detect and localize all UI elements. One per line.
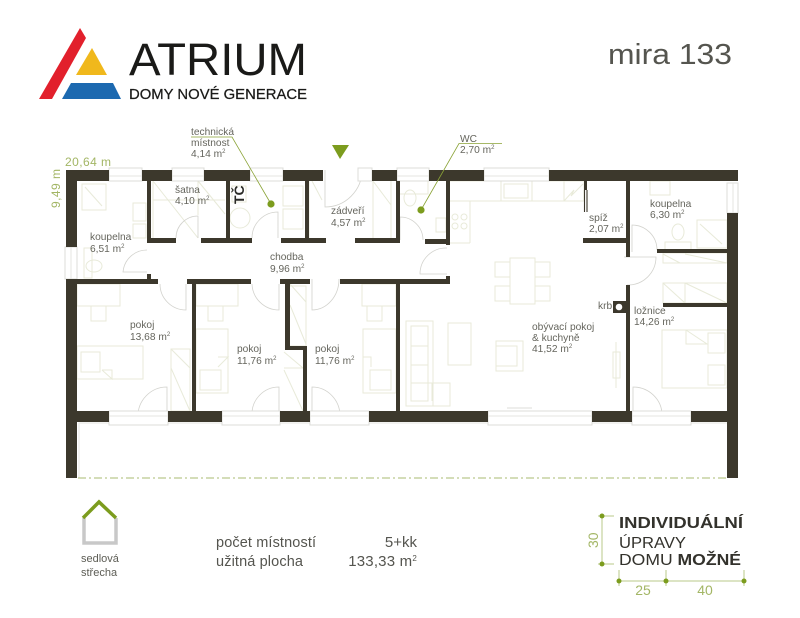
- label: zádveří: 2: [362, 218, 366, 224]
- stat: usable area: 2: [412, 554, 417, 563]
- label: pokoj 11,76 left: 11,76 m: [237, 356, 273, 367]
- icon: red stripe: [39, 28, 86, 99]
- stat: usable area: užitná plocha: [216, 554, 304, 570]
- label: pokoj 13,68: pokoj: [130, 320, 154, 331]
- label: chodba: 2: [301, 264, 305, 270]
- floor plan: [65, 168, 738, 478]
- label: ložnice: ložnice: [634, 306, 666, 317]
- label: ložnice: 14,26 m: [634, 317, 671, 328]
- walls: [66, 170, 738, 478]
- windows: [65, 168, 738, 425]
- door swings: [123, 170, 662, 417]
- label: ložnice: 2: [671, 317, 675, 323]
- label: spíž: 2,07 m: [589, 224, 620, 235]
- stat: rooms: [216, 534, 417, 551]
- label: koupelna left: 6,51 m: [90, 244, 121, 255]
- logo tagline: DOMY NOVÉ GENERACE: [129, 86, 307, 103]
- label: obývací pokoj: 2: [569, 344, 573, 350]
- krb: krb: [598, 301, 612, 312]
- label: spíž: 2: [620, 224, 624, 230]
- icon: entrance arrow: [332, 145, 349, 159]
- label: spíž: spíž: [589, 213, 608, 224]
- label: pokoj 13,68: 2: [167, 332, 171, 338]
- label: zádveří: zádveří: [331, 206, 365, 217]
- dimension: depth: 9,49 m: [49, 169, 63, 208]
- callout: technická místnost: 2: [222, 149, 226, 155]
- roof type: [81, 502, 120, 579]
- label: obývací pokoj: obývací pokoj: [532, 322, 594, 333]
- badge text: ÚPRAVY: [619, 533, 686, 552]
- logo wordmark: ATRIUM: [129, 34, 307, 85]
- dimension lines: [598, 514, 746, 586]
- icon: yellow triangle: [76, 48, 107, 75]
- callout: technická místnost: [191, 127, 275, 208]
- callout: technická místnost: místnost: [191, 138, 230, 149]
- badge text: DOMU MOŽNÉ: [619, 550, 741, 569]
- callout: WC: 2: [491, 145, 495, 151]
- label: koupelna right: 6,30 m: [650, 210, 681, 221]
- label: chodba: 9,96 m: [270, 264, 301, 275]
- stats: [216, 534, 417, 570]
- badge text: INDIVIDUÁLNÍ: [619, 513, 744, 532]
- callout: technická místnost: 4,14 m: [191, 149, 222, 160]
- label: pokoj 11,76 right: 2: [351, 356, 355, 362]
- krb: [598, 301, 630, 313]
- furniture: [77, 181, 727, 411]
- label: zádveří: 4,57 m: [331, 218, 362, 229]
- label: obývací pokoj: & kuchyně: [532, 333, 580, 344]
- label: pokoj 11,76 left: 2: [273, 356, 277, 362]
- label: koupelna right: koupelna: [650, 199, 692, 210]
- title: mira 133: mira 133: [608, 39, 732, 71]
- callout: WC: 2,70 m: [460, 145, 491, 156]
- dimension: 40: 40: [697, 582, 713, 598]
- roof label: střecha: [81, 567, 118, 579]
- dimension: 25: 25: [635, 582, 651, 598]
- stat: rooms: 5+kk: [385, 534, 417, 551]
- terrace outline: [78, 423, 727, 478]
- logo: ATRIUM: [39, 28, 307, 103]
- callout: WC: WC: [460, 134, 477, 145]
- individual modifications badge: [585, 513, 746, 598]
- callout: technická místnost: technická: [191, 127, 234, 138]
- label: koupelna left: koupelna: [90, 232, 132, 243]
- dimension: width: 20,64 m: [65, 155, 111, 169]
- stat: usable area: [216, 553, 417, 570]
- label: koupelna left: 2: [121, 244, 125, 250]
- label: šatna: 2: [206, 196, 210, 202]
- label: obývací pokoj: 41,52 m: [532, 344, 569, 355]
- icon: gable roof house: [83, 502, 116, 543]
- label: TČ: TČ: [230, 185, 247, 204]
- label: pokoj 11,76 left: pokoj: [237, 344, 261, 355]
- label: pokoj 13,68: 13,68 m: [130, 332, 167, 343]
- stat: usable area: 133,33 m: [348, 553, 412, 570]
- label: chodba: chodba: [270, 252, 304, 263]
- dimension: 30: 30: [585, 532, 601, 548]
- roof label: sedlová: [81, 553, 120, 565]
- label: šatna: 4,10 m: [175, 196, 206, 207]
- stat: rooms: počet místností: [216, 535, 316, 551]
- icon: blue trapezoid: [62, 83, 121, 99]
- label: šatna: šatna: [175, 185, 200, 196]
- spíž sliding door: [584, 190, 587, 212]
- label: pokoj 11,76 right: pokoj: [315, 344, 339, 355]
- callout: WC: [417, 134, 502, 214]
- label: koupelna right: 2: [681, 210, 685, 216]
- label: pokoj 11,76 right: 11,76 m: [315, 356, 351, 367]
- badge text: [619, 513, 744, 569]
